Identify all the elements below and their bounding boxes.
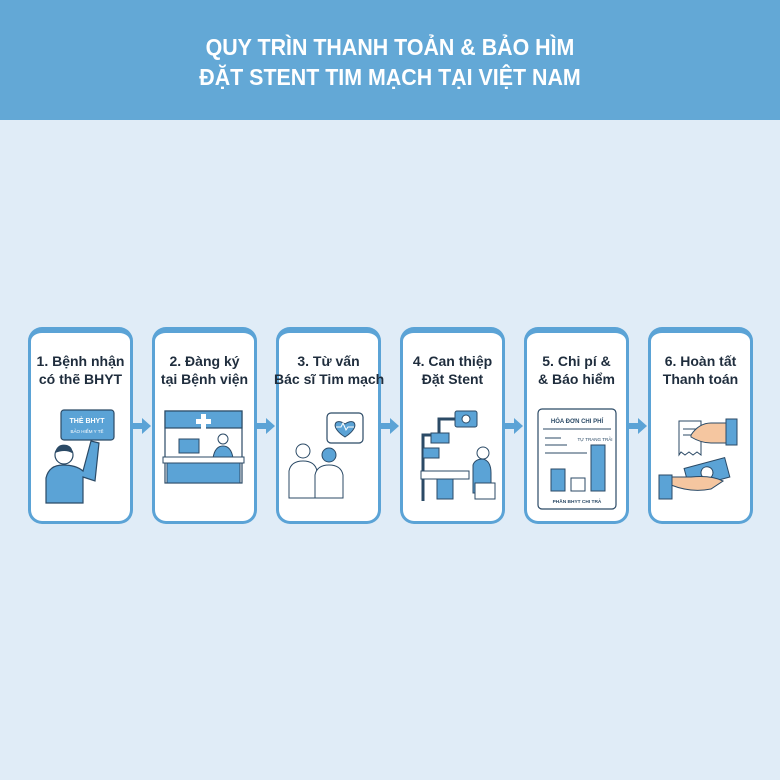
card 1 (28, 327, 133, 524)
icon: cath lab (420, 410, 496, 501)
heading 1 (37, 353, 124, 387)
heading 5: 5. Chi pí & (542, 353, 611, 369)
heading 2: tại Bệnh viện (161, 371, 248, 387)
icon: patient with card: THẺ BHYT (70, 416, 105, 425)
icon: invoice chart: TỰ TRANG TRẢI (578, 436, 612, 442)
arrow 5 (629, 418, 647, 434)
icon: invoice chart: PHẦN BHYT CHI TRẢ (553, 498, 602, 505)
heading 1: 1. Bệnh nhận (37, 353, 124, 369)
icon: reception desk (162, 410, 244, 484)
heading 1: có thẽ BHYT (39, 371, 122, 387)
arrow 1 (133, 418, 151, 434)
card 6 (648, 327, 753, 524)
heading 5 (538, 353, 615, 387)
heading 4: Đặt Stent (422, 371, 483, 387)
card 2 (152, 327, 257, 524)
heading 2: 2. Đàng ký (169, 353, 240, 369)
card 5 (524, 327, 629, 524)
icon: patient with card (45, 409, 115, 504)
heading 6: 6. Hoàn tất (665, 353, 736, 369)
heading 2 (161, 353, 248, 387)
heading 6: Thanh toán (663, 371, 738, 387)
heading 4: 4. Can thiệp (413, 353, 492, 369)
title: ĐẶT STENT TIM MẠCH TẠI VIỆT NAM (199, 64, 581, 90)
title (0, 0, 780, 120)
icon: hands exchanging receipt and money (658, 418, 738, 500)
heading 3: Bác sĩ Tim mạch (274, 371, 384, 387)
heading 3: 3. Từ vấn (297, 353, 360, 369)
icon: doctors with heart bubble (288, 412, 364, 498)
title: QUY TRÌN THANH TOẢN & BẢO HÌM (206, 34, 574, 60)
icon: invoice chart: HÓA ĐƠN CHI PHÍ (551, 417, 603, 425)
arrow 2 (257, 418, 275, 434)
arrow 3 (381, 418, 399, 434)
icon: patient with card: BẢO HIỂM Y TẾ (70, 428, 104, 434)
heading 5: & Báo hiểm (538, 371, 615, 387)
arrow 4 (505, 418, 523, 434)
heading 4 (413, 353, 492, 387)
card 3 (276, 327, 381, 524)
heading 3 (274, 353, 384, 387)
card 4 (400, 327, 505, 524)
icon: invoice chart (537, 408, 617, 510)
heading 6 (662, 353, 738, 387)
